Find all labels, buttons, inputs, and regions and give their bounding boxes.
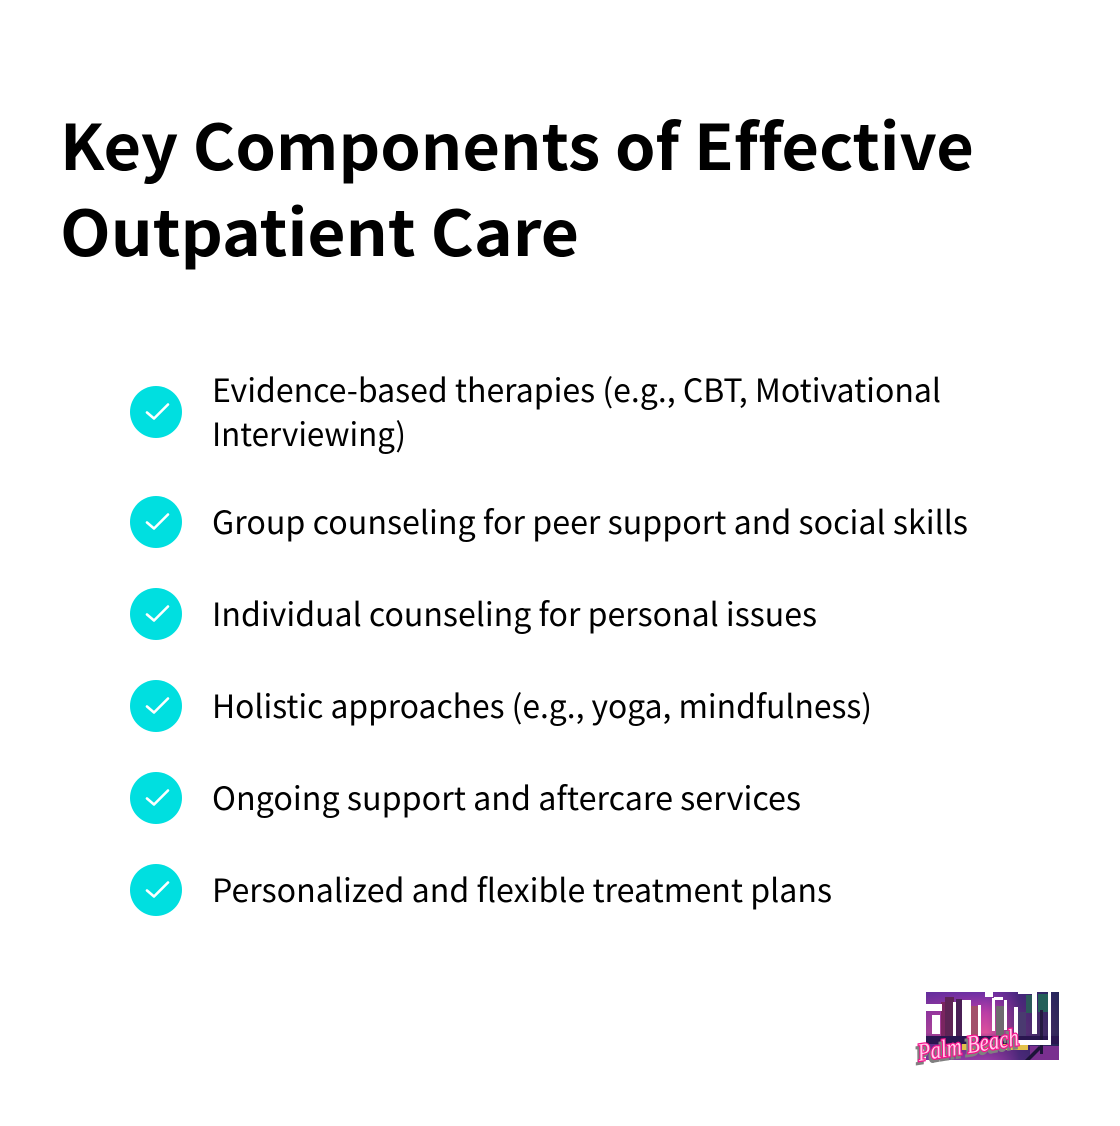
title: Key Components of Effective: [60, 98, 974, 189]
logo letter slits: [926, 988, 1051, 1045]
item: group counseling: Group counseling for peer support and social skills: [212, 498, 968, 544]
item: evidence-based therapies: Interviewing): [212, 410, 406, 456]
logo script text: Palm Beach: [913, 1027, 1019, 1070]
logo: Amity Palm Beach: [913, 988, 1059, 1070]
item: personalized plans: Personalized and flexible treatment plans: [212, 866, 832, 912]
item: holistic approaches: Holistic approaches (e.g., yoga, mindfulness): [212, 682, 872, 728]
item: ongoing support: Ongoing support and aftercare services: [212, 774, 801, 820]
item: evidence-based therapies: [130, 366, 941, 456]
title: [60, 98, 974, 275]
checklist: [130, 366, 968, 916]
item: evidence-based therapies: Evidence-based therapies (e.g., CBT, Motivational: [212, 366, 941, 412]
item: individual counseling: Individual counseling for personal issues: [212, 590, 817, 636]
title: Outpatient Care: [60, 184, 579, 275]
logo script text: Palm Beach: [915, 1024, 1021, 1067]
